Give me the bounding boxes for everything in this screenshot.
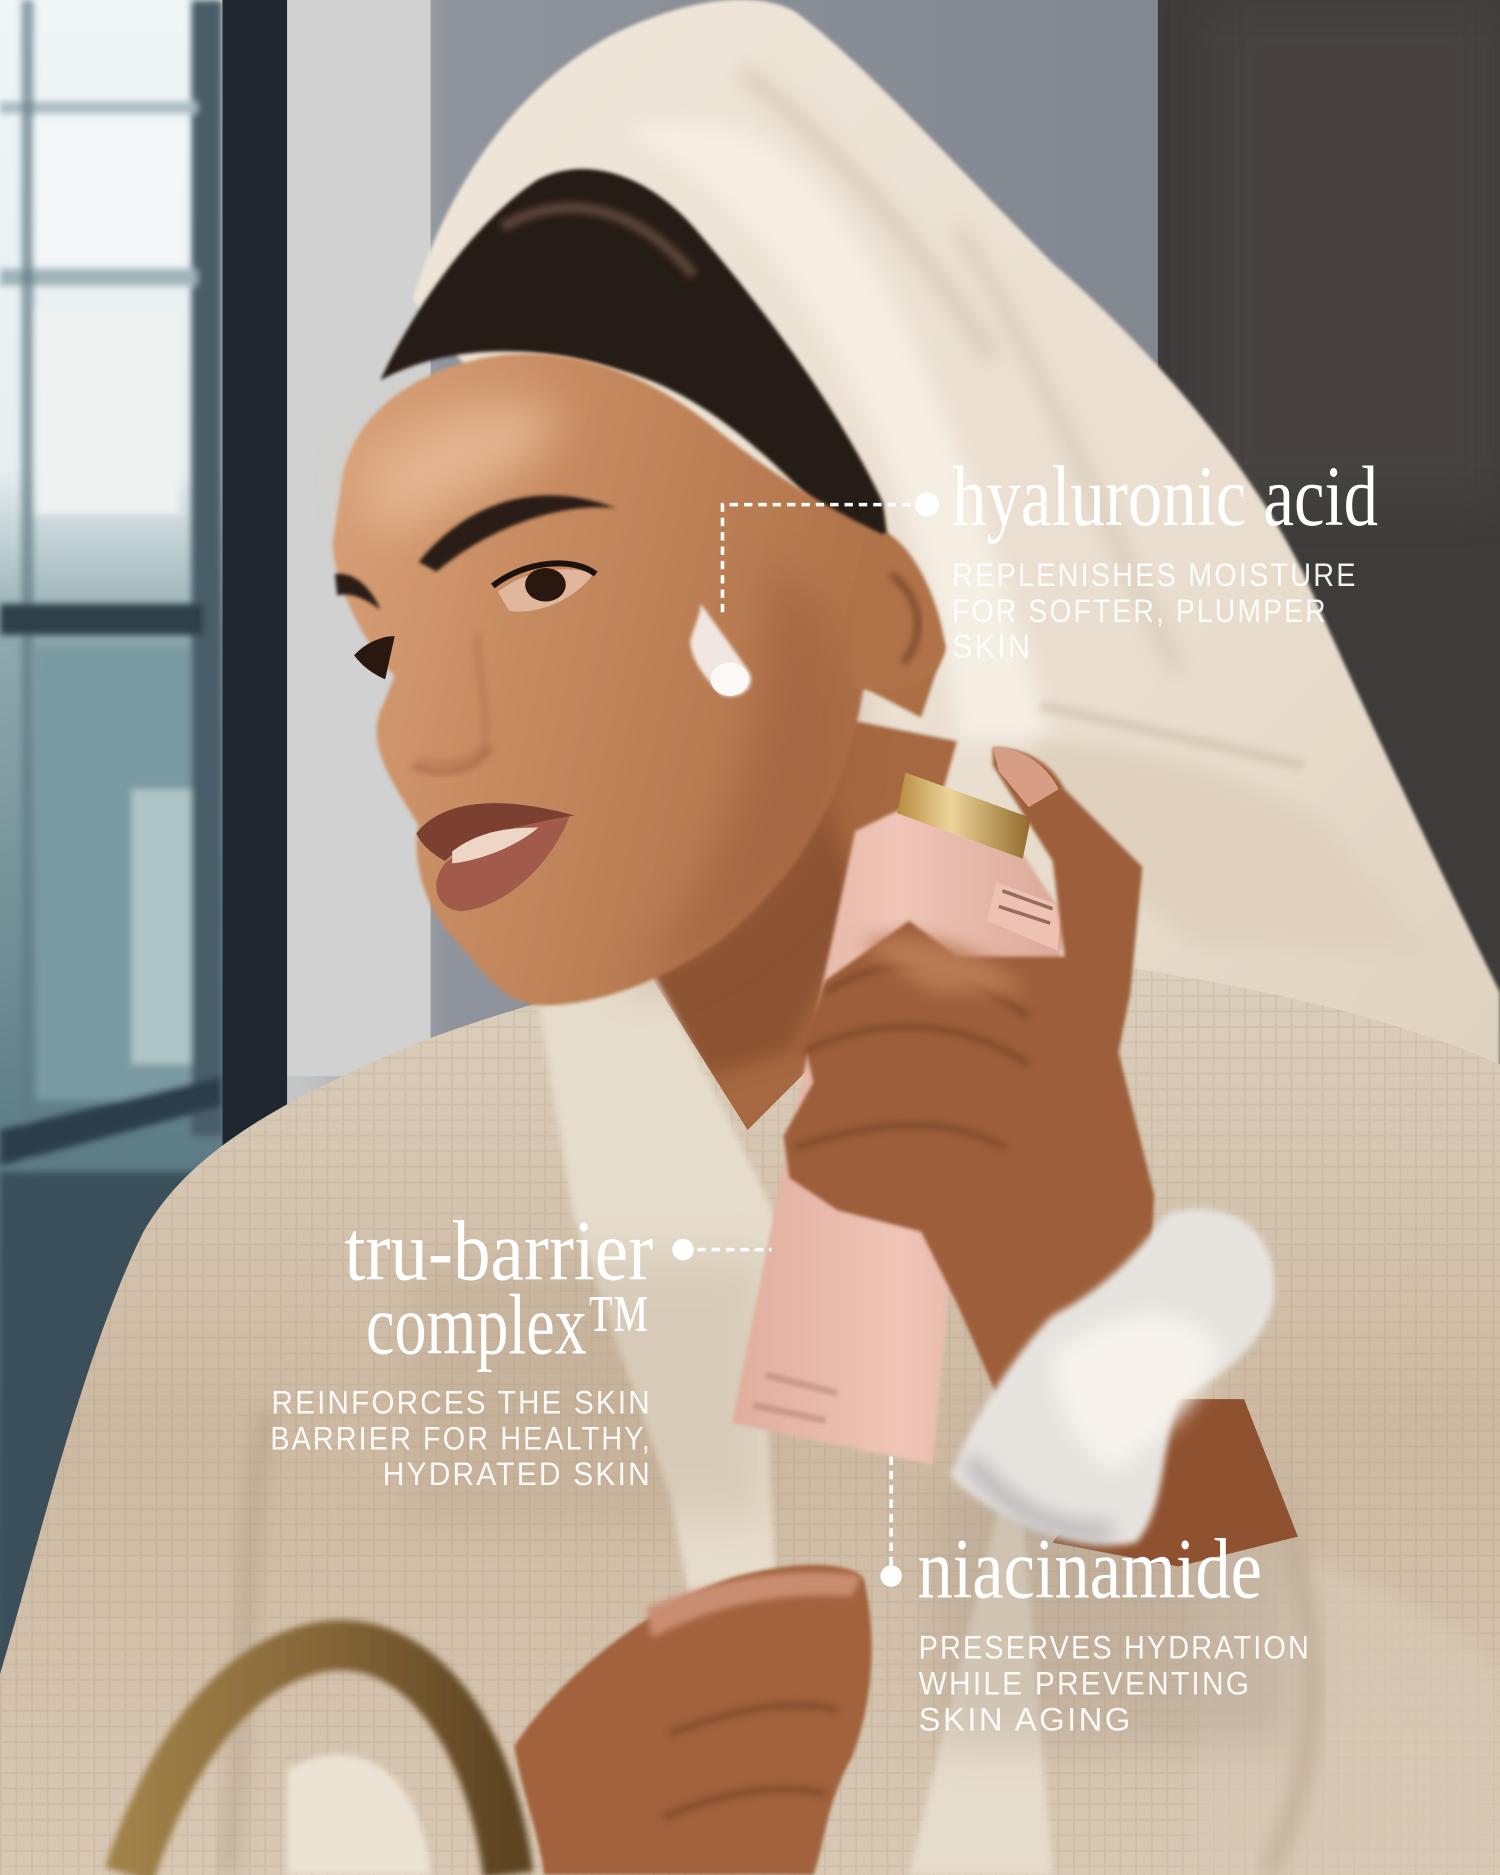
heading: tru-barrier complex: tru-barrier (344, 1203, 653, 1298)
heading: niacinamide: niacinamide (917, 1521, 1262, 1617)
callout line: niacinamide (880, 1456, 902, 1587)
heading: tru-barrier complex: complex™ (366, 1277, 650, 1373)
lower hand (514, 1565, 871, 1875)
callout: hyaluronic acid (722, 448, 1378, 665)
description: niacinamide (919, 1630, 1311, 1737)
ear (852, 532, 945, 690)
bottle (732, 772, 1067, 1465)
towel wrap (413, 0, 1500, 1148)
description: hyaluronic acid: SKIN (952, 629, 1032, 665)
description: hyaluronic acid: REPLENISHES MOISTURE (952, 557, 1358, 593)
description: tru-barrier complex: HYDRATED SKIN (383, 1456, 652, 1492)
callout: tru-barrier complex (270, 1203, 772, 1492)
neck (610, 717, 957, 1136)
eyebrows and eyes (335, 495, 616, 679)
description: niacinamide: PRESERVES HYDRATION (919, 1630, 1311, 1666)
wrist and scrunchie (951, 1209, 1298, 1566)
description: hyaluronic acid: FOR SOFTER, PLUMPER (952, 593, 1328, 629)
heading: hyaluronic acid: hyaluronic acid (952, 448, 1378, 544)
heading: tru-barrier complex (344, 1203, 653, 1373)
hair (380, 169, 891, 562)
robe (0, 969, 1500, 1875)
description: tru-barrier complex (270, 1384, 652, 1492)
holding hand (783, 747, 1154, 1399)
window (0, 0, 287, 1875)
callout line: hyaluronic acid (722, 493, 939, 612)
description: tru-barrier complex: BARRIER FOR HEALTHY, (270, 1420, 652, 1456)
description: niacinamide: WHILE PREVENTING (919, 1665, 1251, 1701)
cream swatch (690, 604, 751, 697)
faucet (129, 1645, 508, 1875)
callout: niacinamide (880, 1456, 1311, 1737)
face (333, 354, 945, 1005)
callout line: tru-barrier complex (672, 1239, 772, 1260)
nose and lips (413, 747, 574, 911)
description: tru-barrier complex: REINFORCES THE SKIN (272, 1384, 652, 1420)
description: hyaluronic acid (952, 557, 1358, 665)
description: niacinamide: SKIN AGING (919, 1701, 1133, 1737)
